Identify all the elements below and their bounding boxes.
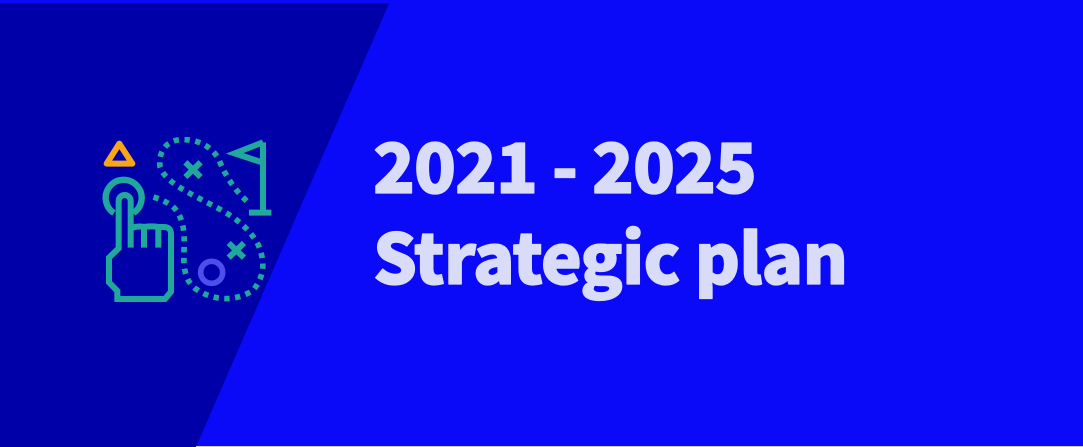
heading: strategic plan: Strategic plan <box>373 204 848 304</box>
icon: dotted route upper <box>152 140 263 299</box>
icon: strategy plan with hand, flag and dotted route <box>106 140 271 299</box>
icon: pointing hand <box>109 195 171 299</box>
icon: flag <box>235 142 271 213</box>
icon: second cross <box>229 243 244 258</box>
panel: dark slanted background <box>0 4 389 447</box>
icon: orange warning triangle <box>107 144 132 164</box>
heading: years: 2021 - 2025 <box>373 113 757 213</box>
icon: touch ring <box>106 180 142 213</box>
icon: blue circle <box>201 261 223 283</box>
icon: first cross <box>185 162 201 177</box>
